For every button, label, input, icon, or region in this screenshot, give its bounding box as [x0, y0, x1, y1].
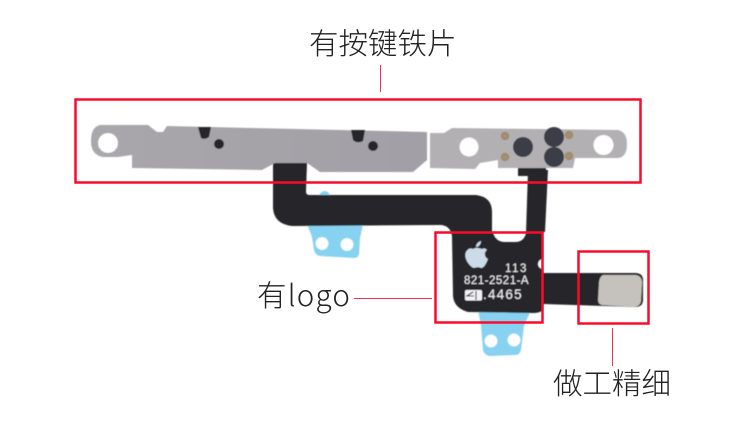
black flex cable: [273, 163, 643, 313]
printed text: code: .4465: [483, 287, 523, 302]
printed text: 113: 113: [505, 263, 528, 275]
blue adhesive tab: upper: [307, 191, 363, 258]
leader line: logo: [354, 298, 432, 300]
metal pad on flex end: [598, 275, 642, 307]
copper rivets: [502, 132, 572, 160]
button: upper: [544, 127, 564, 147]
metal bracket: left: [91, 125, 427, 172]
red box: logo: [436, 232, 542, 322]
red box: workmanship: [578, 252, 648, 324]
heading: top label: 有按键铁片: [309, 21, 457, 63]
leader line: top: [380, 65, 382, 92]
notch in flex body: [538, 259, 548, 269]
heading: logo label: 有logo: [257, 273, 351, 315]
metal bracket: right with buttons: [430, 127, 627, 176]
icon: apple logo: [465, 241, 488, 268]
flex cable assembly: [91, 125, 643, 356]
button: lower: [544, 147, 564, 167]
printed mark: [465, 290, 482, 300]
button: center: [513, 137, 533, 157]
red box: buttons bracket: [76, 100, 640, 182]
heading: bottom label: 做工精细: [553, 361, 671, 403]
printed text: part number: 821-2521-A: [464, 275, 529, 287]
bracket slots: [198, 127, 365, 142]
leader line: bottom: [612, 328, 614, 366]
blue adhesive tab: lower: [478, 310, 531, 356]
